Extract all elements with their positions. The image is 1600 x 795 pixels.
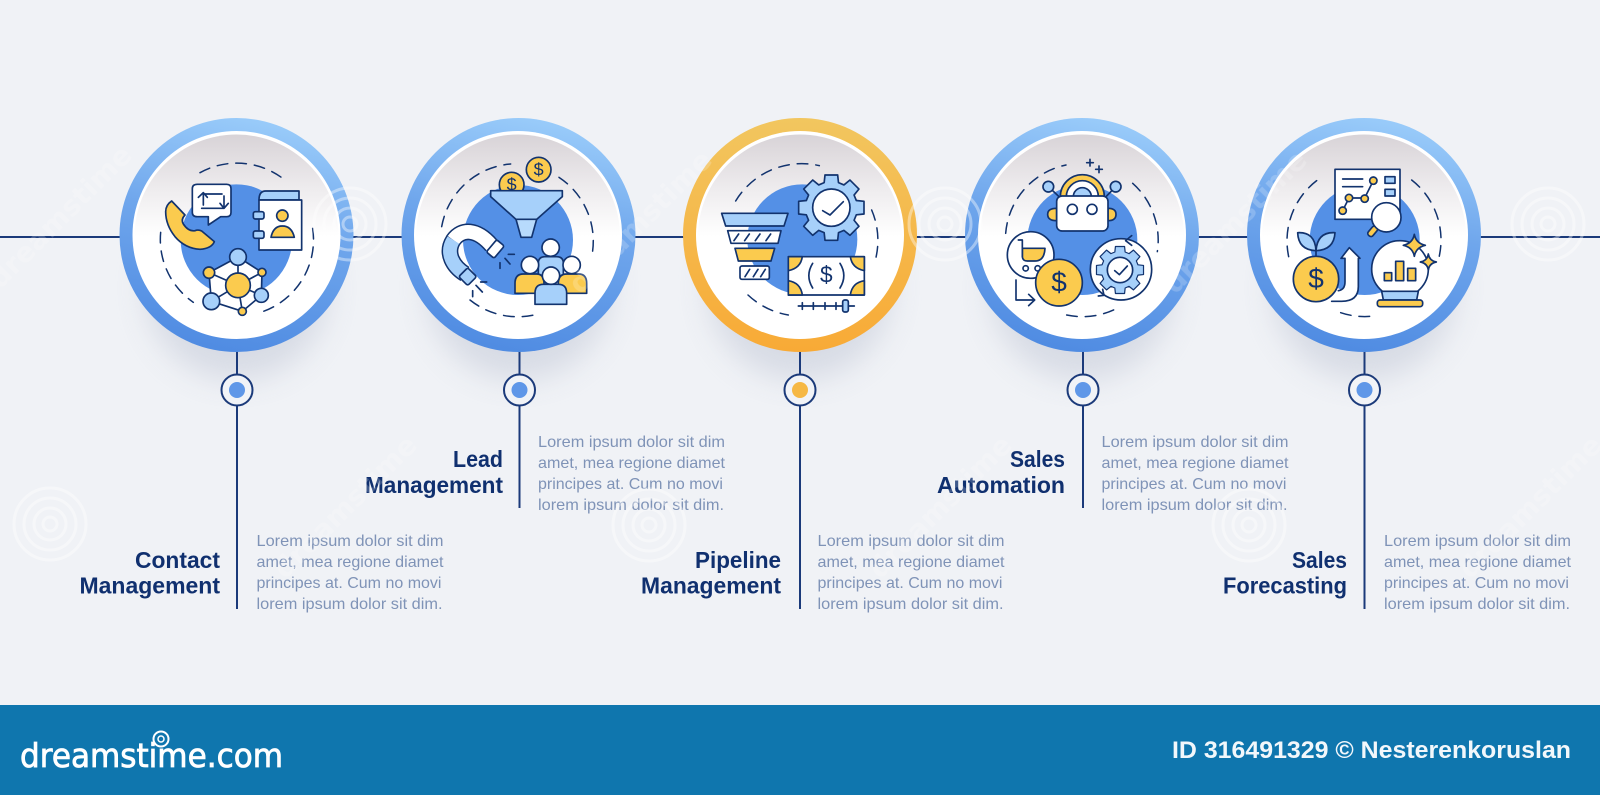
watermark text [0,138,1600,585]
step 1: contact management [80,118,444,613]
text block 3: lorem ipsum dolor sit dim. [818,596,1004,613]
connector and node 2 [504,350,535,508]
step 5: sales forecasting [1223,118,1572,613]
icon: gear with check [799,175,864,240]
plant coin dollar sign: $ [1308,263,1324,294]
icon: growth arrow [1332,248,1360,301]
icon: slider [798,300,854,312]
icon: pipeline management [722,164,878,315]
icon: dollar coin [1036,259,1082,306]
heading: sales automation: Automation [937,472,1065,498]
icon: crystal ball [1372,234,1436,307]
text block 3 [818,533,1005,613]
heading: contact management [80,547,220,598]
horizontal connector line [0,236,1600,238]
icon: shopping cart [1007,232,1054,306]
icon: people group [515,239,587,304]
heading: sales forecasting: Sales [1292,547,1347,573]
text block 2 [538,434,726,514]
watermark text: dreamstime [862,428,1018,585]
text block 4: Lorem ipsum dolor sit dim [1102,434,1288,451]
drop shadows of circles [145,196,1456,380]
text block 5: amet, mea regione diamet [1384,554,1572,571]
icon: magnifier [1367,203,1401,238]
step 3: pipeline management [641,118,1005,613]
text block 1: Lorem ipsum dolor sit dim [256,533,444,550]
heading: sales automation: Sales [1010,446,1065,472]
ring 5 [1247,118,1481,352]
heading: lead management: Lead [453,446,503,472]
step 2: lead management [365,118,726,514]
ring 4 [965,118,1199,352]
text block 4 [1102,434,1289,514]
connector and node 5 [1349,350,1380,609]
heading: contact management: Management [80,572,220,598]
text block 2: principes at. Cum no movi [538,476,723,493]
coin dollar sign: $ [1051,267,1067,298]
icon: cycling gear [1090,236,1152,300]
text block 2: Lorem ipsum dolor sit dim [538,434,725,451]
text block 5: Lorem ipsum dolor sit dim [1384,533,1571,550]
text block 1: principes at. Cum no movi [256,575,442,592]
icon: address book [253,191,302,250]
icon: sales forecasting [1287,169,1441,317]
ring 3 [683,118,917,352]
heading: lead management [365,446,503,498]
text block 4: lorem ipsum dolor sit dim. [1102,497,1288,514]
banknote dollar sign: $ [820,262,833,288]
icon: plant coin [1293,233,1339,302]
icon: phone [166,201,214,249]
heading: sales forecasting: Forecasting [1223,572,1347,598]
connector and node 3 [784,350,816,609]
footer logo: dreamstime.com [20,736,283,775]
icon: banknote [788,257,864,295]
watermark spirals [14,188,1584,561]
watermark text: dreamstime [562,143,718,300]
coin dollar signs: $ [507,175,517,195]
icon: funnel [491,191,562,237]
heading: contact management: Contact [135,547,220,573]
text block 2: lorem ipsum dolor sit dim. [538,497,724,514]
text block 3: amet, mea regione diamet [818,554,1005,571]
text block 5 [1384,533,1572,613]
text block 5: lorem ipsum dolor sit dim. [1384,596,1570,613]
icon: speech bubble [192,184,231,225]
icon: network [203,249,268,315]
watermark text: dreamstime [267,428,423,585]
footer credit: ID 316491329 © Nesterenkoruslan [1172,737,1571,764]
connector and node 4 [1068,350,1098,508]
icon: tiered funnel [722,213,788,279]
watermark text: dreamstime [1157,143,1313,300]
step 4: sales automation [937,118,1289,514]
heading: sales automation [937,446,1065,498]
text block 5: principes at. Cum no movi [1384,575,1569,592]
icon: contact management [160,163,314,315]
coin dollar signs: $ [534,160,544,180]
text block 4: principes at. Cum no movi [1102,476,1286,493]
ring 2 [402,118,636,352]
text block 4: amet, mea regione diamet [1102,455,1289,472]
text block 1: lorem ipsum dolor sit dim. [256,596,442,613]
heading: lead management: Management [365,472,503,498]
heading: pipeline management: Pipeline [695,547,781,573]
icon: sales automation [1006,159,1158,317]
text block 3: principes at. Cum no movi [818,575,1002,592]
coin dollar signs [507,160,544,195]
icon: sparkles [1087,159,1102,173]
icon: lead management [442,157,593,317]
icon: chart board [1335,169,1400,219]
text block 3: Lorem ipsum dolor sit dim [818,533,1004,550]
connector and node 1 [222,350,252,609]
text block 1 [256,533,444,613]
icon: coins [499,157,551,197]
icon: robot [1043,175,1121,231]
heading: pipeline management: Management [641,572,781,598]
footer bar [0,705,1600,795]
heading: pipeline management [641,547,781,598]
text block 2: amet, mea regione diamet [538,455,726,472]
heading: sales forecasting [1223,547,1347,598]
ring 1 [120,118,354,352]
text block 1: amet, mea regione diamet [256,554,444,571]
icon: magnet [450,232,514,297]
